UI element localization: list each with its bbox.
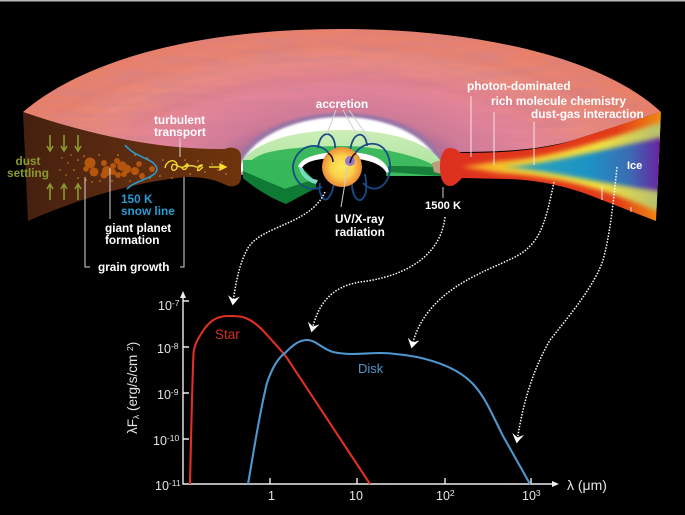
leader lines center	[327, 110, 443, 207]
y axis title: (erg/s/cm	[125, 351, 140, 415]
x axis title: λ (μm)	[567, 477, 607, 493]
dust grains small	[59, 154, 227, 183]
dark field roots	[328, 153, 356, 163]
y tick labels: 10	[157, 342, 171, 356]
chart: spectral energy distribution	[125, 291, 607, 503]
label: accretion: accretion	[316, 97, 368, 111]
inner hole	[298, 152, 389, 190]
label: dust settling: dust	[16, 154, 41, 168]
label: Disk: Disk	[358, 361, 384, 376]
panel: inner green disk	[240, 130, 445, 204]
y axis title: λ	[131, 414, 141, 419]
y axis title: 2	[125, 346, 135, 351]
x tick labels: 3	[536, 488, 541, 498]
y tick labels: 10	[157, 388, 171, 402]
field loops behind	[293, 134, 390, 200]
x tick labels: 2	[450, 488, 455, 498]
label: grain growth: grain growth	[98, 260, 169, 274]
label: giant planet formation: formation	[105, 233, 159, 247]
label: turbulent transport: turbulent	[154, 113, 205, 127]
label: dust-gas interaction: dust-gas interaction	[531, 107, 644, 121]
label: dust settling: settling	[7, 166, 49, 180]
y tick labels: -9	[171, 387, 179, 397]
panel: inner white rim	[233, 113, 447, 172]
snow line curve	[125, 145, 157, 189]
star	[322, 147, 362, 187]
label: giant planet formation: giant planet	[105, 221, 171, 235]
top border line	[0, 0, 685, 2]
x tick labels	[268, 488, 541, 503]
label: turbulent transport: transport	[154, 125, 206, 139]
label: dust settling arrows	[47, 135, 81, 200]
UV spot	[345, 156, 355, 166]
label: Star: Star	[215, 327, 240, 342]
icon: turbulent squiggle and arrow	[165, 161, 226, 171]
y axis title: )	[125, 342, 140, 346]
label: 150 K snow line: 150 K	[121, 192, 153, 206]
label: photon-dominated: photon-dominated	[467, 79, 571, 93]
y tick labels	[153, 298, 181, 493]
leader lines right	[471, 96, 631, 212]
y tick labels: 10	[155, 479, 169, 493]
x tick labels: 10	[522, 489, 536, 503]
dotted arrows	[233, 167, 617, 441]
y tick labels: 10	[158, 299, 172, 313]
label: 1500 K: 1500 K	[425, 200, 461, 212]
y tick labels: -10	[167, 433, 179, 443]
label: UV/X-ray radiation: radiation	[335, 225, 385, 239]
x tick labels: 10	[349, 489, 363, 503]
star with magnetic field	[293, 134, 390, 200]
curve: star	[190, 316, 370, 484]
curve: disk	[248, 340, 530, 484]
y axis title: λF	[125, 419, 140, 434]
panel: left disk cross-section	[23, 112, 241, 221]
leader lines left	[85, 138, 184, 267]
x tick labels: 1	[268, 489, 275, 503]
label: Ice: Ice	[627, 160, 642, 172]
y tick labels: -7	[172, 298, 180, 308]
y tick labels: -11	[169, 478, 181, 488]
y tick labels: -8	[171, 341, 179, 351]
label: 150 K snow line: snow line	[121, 204, 175, 218]
label: UV/X-ray radiation: UV/X-ray	[335, 212, 385, 226]
label: rich molecule chemistry: rich molecule chemistry	[491, 94, 627, 108]
y tick labels: 10	[153, 434, 167, 448]
panel: right disk cross-section	[440, 112, 661, 221]
axes	[183, 296, 553, 484]
x tick labels: 10	[436, 489, 450, 503]
dust grains large	[83, 158, 155, 179]
panel: protoplanetary disk surface	[20, 25, 665, 175]
